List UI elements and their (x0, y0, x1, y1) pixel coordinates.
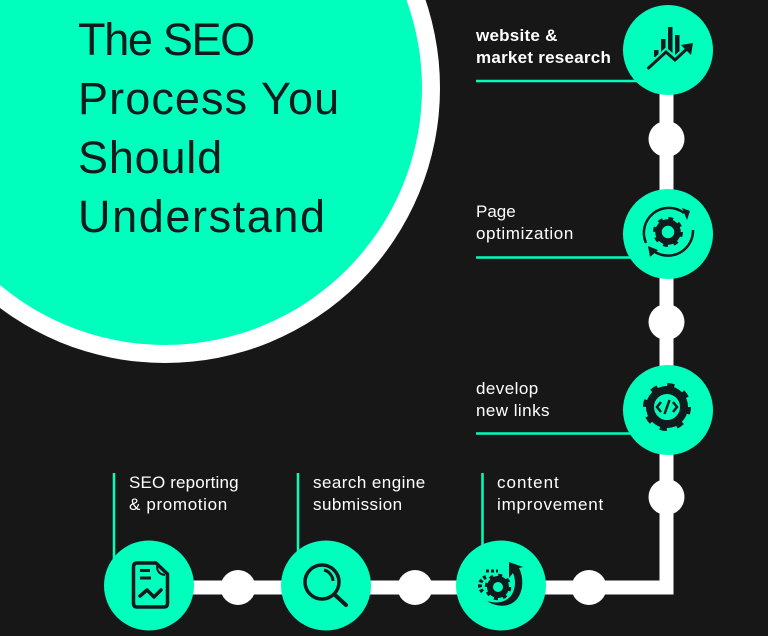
label: page optimization (476, 202, 574, 243)
title: The SEO (78, 14, 254, 65)
step 4 icon: content improvement gears and arrow (456, 540, 546, 630)
label: search engine submission: submission (313, 495, 403, 514)
label: website & market research (476, 26, 611, 67)
step 5 icon: magnifying glass (281, 540, 371, 630)
teal leader lines (114, 81, 640, 560)
process path line (149, 50, 666, 588)
connector dots (220, 121, 684, 605)
label: page optimization: Page (476, 202, 516, 221)
title: Should (78, 132, 223, 183)
title: Understand (78, 191, 327, 242)
step 2 icon: optimization gear with arrows (623, 189, 713, 279)
label: content improvement: content (497, 473, 560, 492)
label: SEO reporting & promotion: & promotion (129, 495, 228, 514)
big circle panel (0, 0, 440, 363)
label: develop new links (476, 379, 550, 420)
label: content improvement (497, 473, 604, 514)
title (78, 14, 340, 242)
step 3 icon: code gear (623, 365, 713, 455)
label: develop new links: new links (476, 401, 550, 420)
step 6 icon: report document (104, 540, 194, 630)
label: page optimization: optimization (476, 224, 574, 243)
label: develop new links: develop (476, 379, 539, 398)
label: content improvement: improvement (497, 495, 604, 514)
label: website & market research: market research (476, 48, 611, 67)
label: SEO reporting & promotion: SEO reporting (129, 473, 239, 492)
label: search engine submission: search engine (313, 473, 426, 492)
label: search engine submission (313, 473, 426, 514)
title: Process You (78, 73, 340, 124)
step 1 icon: market research chart (623, 5, 713, 95)
label: SEO reporting & promotion (129, 473, 239, 514)
label: website & market research: website & (476, 26, 558, 45)
